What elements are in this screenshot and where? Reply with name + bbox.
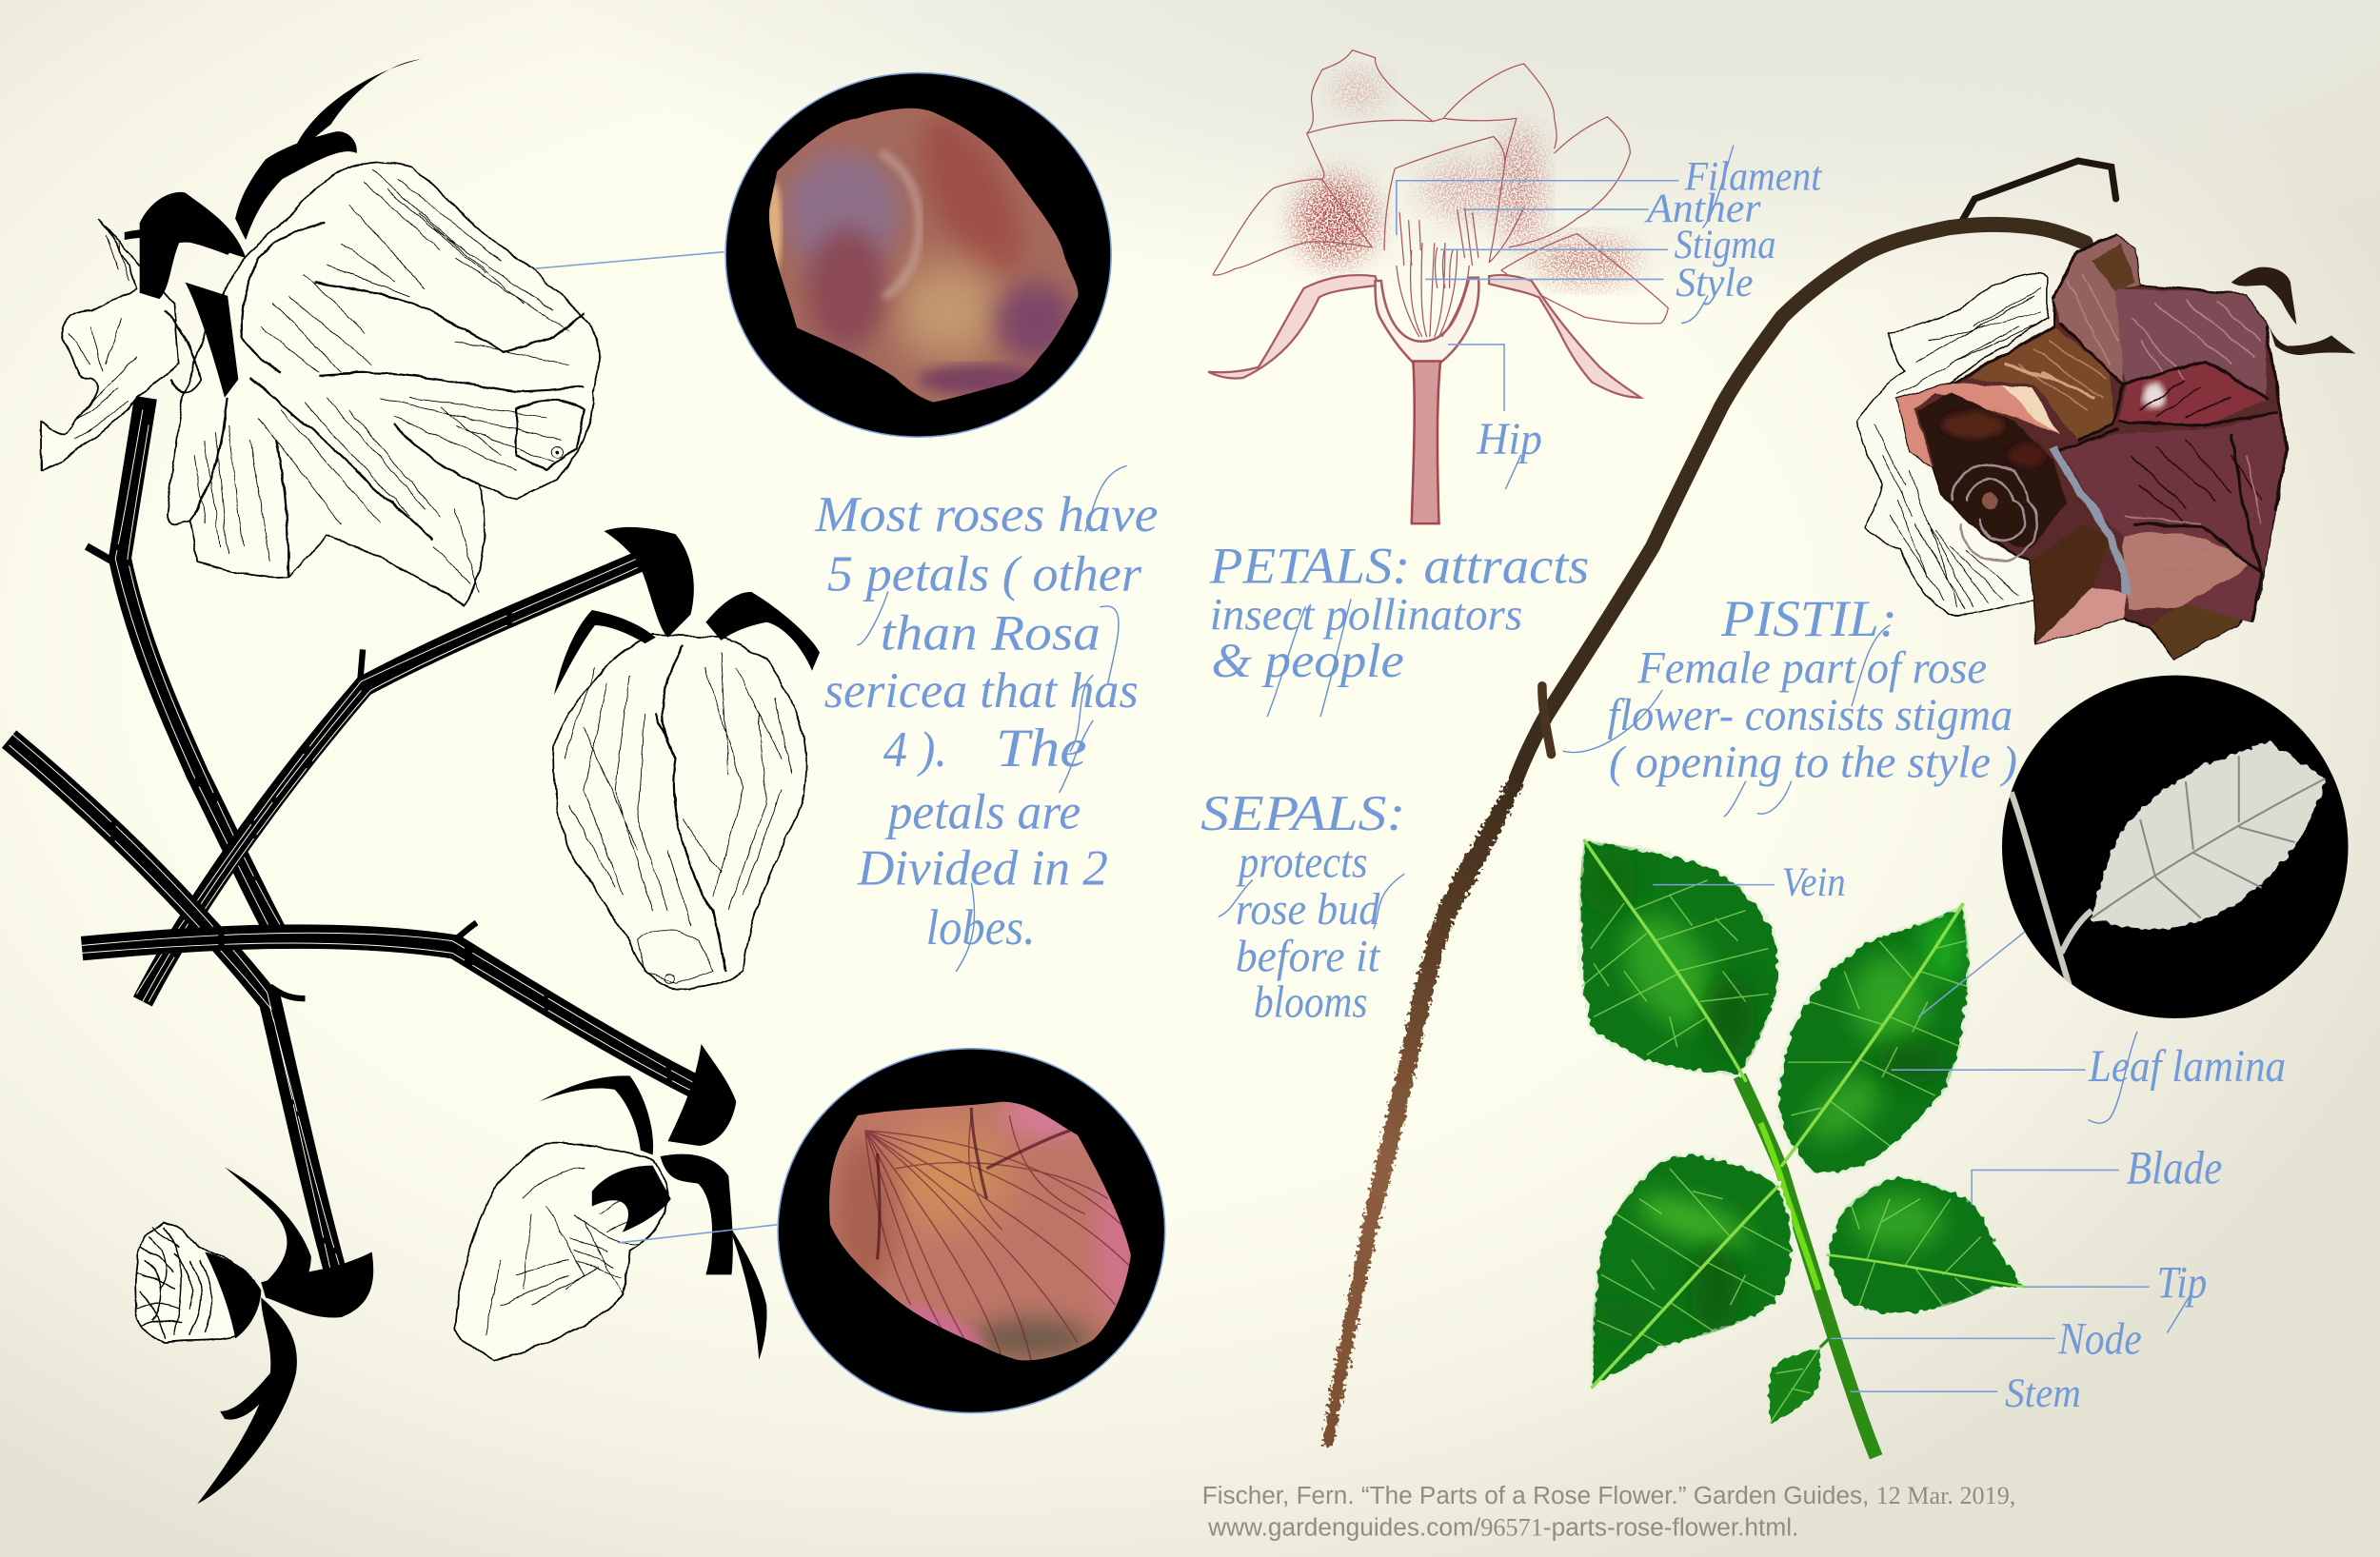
side nub — [1542, 686, 1551, 754]
Hip — [1448, 345, 1542, 488]
text: pistil — [1563, 590, 2017, 817]
sepal curls — [2231, 267, 2355, 355]
Leaf lamina — [1892, 1032, 2286, 1123]
Filament — [1397, 146, 1822, 235]
petal fold lines — [69, 170, 585, 592]
Hip: Hip — [1476, 414, 1542, 464]
text: pistil: PISTIL: — [1720, 590, 1897, 647]
stamens — [1399, 207, 1478, 288]
grey streak — [2053, 447, 2127, 593]
Style: Style — [1676, 261, 1754, 305]
connector: silver leaf — [1918, 932, 2025, 1016]
text: sepals — [1200, 786, 1405, 1027]
illustration: painted rose stem — [1322, 161, 2116, 1447]
illustration: small rose head bottom left — [135, 1167, 373, 1504]
Anther: Anther — [1644, 187, 1761, 231]
text: most roses: 4 ). — [883, 722, 947, 778]
curl petal — [2053, 235, 2138, 384]
connector: bottom petal — [618, 1225, 777, 1243]
petal painting — [769, 108, 1078, 402]
stem: bud — [136, 559, 646, 1001]
text: most roses: than Rosa — [881, 605, 1101, 660]
stem — [1739, 1076, 1876, 1457]
stem: horizontal — [82, 922, 702, 1095]
head curls — [136, 1226, 211, 1338]
bottom brown right — [2151, 564, 2252, 659]
text: sepals: protects — [1236, 838, 1368, 888]
text: petals: & people — [1211, 635, 1404, 688]
leaf: bottom right — [1828, 1176, 2025, 1315]
illustration: bottom dried rose line drawing — [455, 1044, 766, 1361]
text: most roses: petals are — [884, 785, 1081, 840]
leaf: small — [1768, 1332, 1835, 1424]
pink rim — [1897, 383, 2060, 466]
circle: silver leaf — [2002, 676, 2349, 1018]
Leaf lamina: Leaf lamina — [2088, 1041, 2286, 1092]
streaks — [2004, 273, 2262, 569]
text: petals: PETALS: attracts — [1209, 537, 1589, 594]
dark shading and sepals — [197, 1167, 373, 1504]
illustration: rose leaves — [1580, 840, 2025, 1457]
text: pistil: ( opening to the style ) — [1609, 737, 2017, 787]
stem — [1412, 362, 1440, 523]
text: pistil: Female part of rose — [1636, 643, 1987, 694]
Node: Node — [2057, 1313, 2142, 1364]
dark outlines — [1964, 235, 2288, 622]
silhouette base — [1897, 235, 2288, 659]
citation — [1202, 1481, 2015, 1542]
spiral — [1952, 464, 2037, 561]
dark head — [1917, 393, 2066, 549]
receptacle ribs — [1397, 243, 1469, 337]
illustration: dried bud line drawing — [554, 527, 820, 990]
lower brown left — [2031, 523, 2110, 641]
petal outlines — [1213, 50, 1668, 324]
text: most roses — [814, 466, 1159, 972]
head — [135, 1222, 256, 1343]
sepals — [1208, 275, 1641, 398]
Tip: Tip — [2157, 1257, 2207, 1308]
lower big petal — [2060, 413, 2288, 622]
text: petals: insect pollinators — [1210, 590, 1522, 641]
text: sepals: blooms — [1254, 976, 1368, 1027]
leaf: top left — [1580, 840, 1779, 1080]
Vein: Vein — [1782, 860, 1846, 905]
text: sepals: SEPALS: — [1200, 786, 1405, 841]
text: most roses: Most roses have — [814, 487, 1159, 542]
citation: www.gardenguides.com/96571-parts-rose-flower.html. — [1207, 1513, 1798, 1542]
bud petals — [554, 635, 806, 990]
illustration: top dried rose line drawing — [41, 59, 600, 605]
Stem: Stem — [2005, 1371, 2081, 1416]
circle: dried petal top — [725, 73, 1111, 437]
stippled shading — [1297, 73, 1637, 283]
branch — [1956, 161, 2116, 230]
text: most roses: Divided in 2 — [857, 841, 1108, 897]
leaf: bottom left — [1592, 1154, 1793, 1387]
text: pistil: flower- consists stigma — [1607, 690, 2013, 740]
text: most roses: The — [996, 719, 1087, 778]
text: most roses: sericea that has — [824, 663, 1139, 719]
circle: dried petal bottom — [778, 1049, 1165, 1413]
upper stem — [1517, 225, 2086, 778]
Blade: Blade — [2127, 1142, 2222, 1194]
text: petals — [1209, 537, 1589, 717]
lower pink strip — [2037, 587, 2127, 643]
top petal — [2110, 288, 2266, 396]
outlined pale petals — [1858, 274, 2048, 616]
connector: top petal — [534, 252, 724, 268]
ovary and stamens — [1376, 278, 1478, 363]
bud veins — [565, 645, 792, 983]
stem: crossing — [10, 732, 343, 1278]
painted body — [1897, 235, 2288, 659]
text: sepals: before it — [1236, 932, 1381, 982]
Filament: Filament — [1684, 154, 1822, 199]
main petals — [167, 162, 600, 605]
Tip — [2025, 1257, 2207, 1332]
red band — [2119, 362, 2270, 424]
callouts: leaf labels — [1653, 860, 2286, 1416]
illustration: flower cross-section diagram — [1208, 50, 1668, 523]
stem — [2012, 792, 2092, 994]
lower brushed stem — [1322, 776, 1524, 1447]
Stigma: Stigma — [1675, 223, 1775, 267]
Blade — [1972, 1142, 2222, 1205]
citation: Fischer, Fern. “The Parts of a Rose Flower.” Garden Guides, 12 Mar. 2019, — [1202, 1481, 2015, 1509]
text: most roses: lobes. — [926, 900, 1035, 956]
illustration: painted dried rose — [1858, 235, 2355, 659]
pink lower highlights — [2123, 532, 2250, 608]
brown fold — [1964, 326, 2112, 440]
sepals — [125, 59, 421, 398]
bud sepals — [554, 527, 820, 695]
petals — [455, 1142, 668, 1361]
Style — [1425, 261, 1754, 324]
sepals and shading — [539, 1044, 766, 1360]
petal painting — [829, 1102, 1131, 1361]
stem: top rose — [87, 398, 283, 934]
text: most roses: 5 petals ( other — [827, 546, 1142, 601]
leaf — [2092, 740, 2326, 929]
callouts: flower labels — [1397, 146, 1822, 488]
leaf: top right — [1777, 904, 1969, 1174]
text: sepals: rose bud — [1236, 884, 1380, 935]
petal lines — [486, 1169, 664, 1335]
stem highlight — [1760, 1123, 1818, 1290]
illustration: black ink stems — [10, 398, 702, 1278]
left frilled petals — [41, 219, 179, 470]
